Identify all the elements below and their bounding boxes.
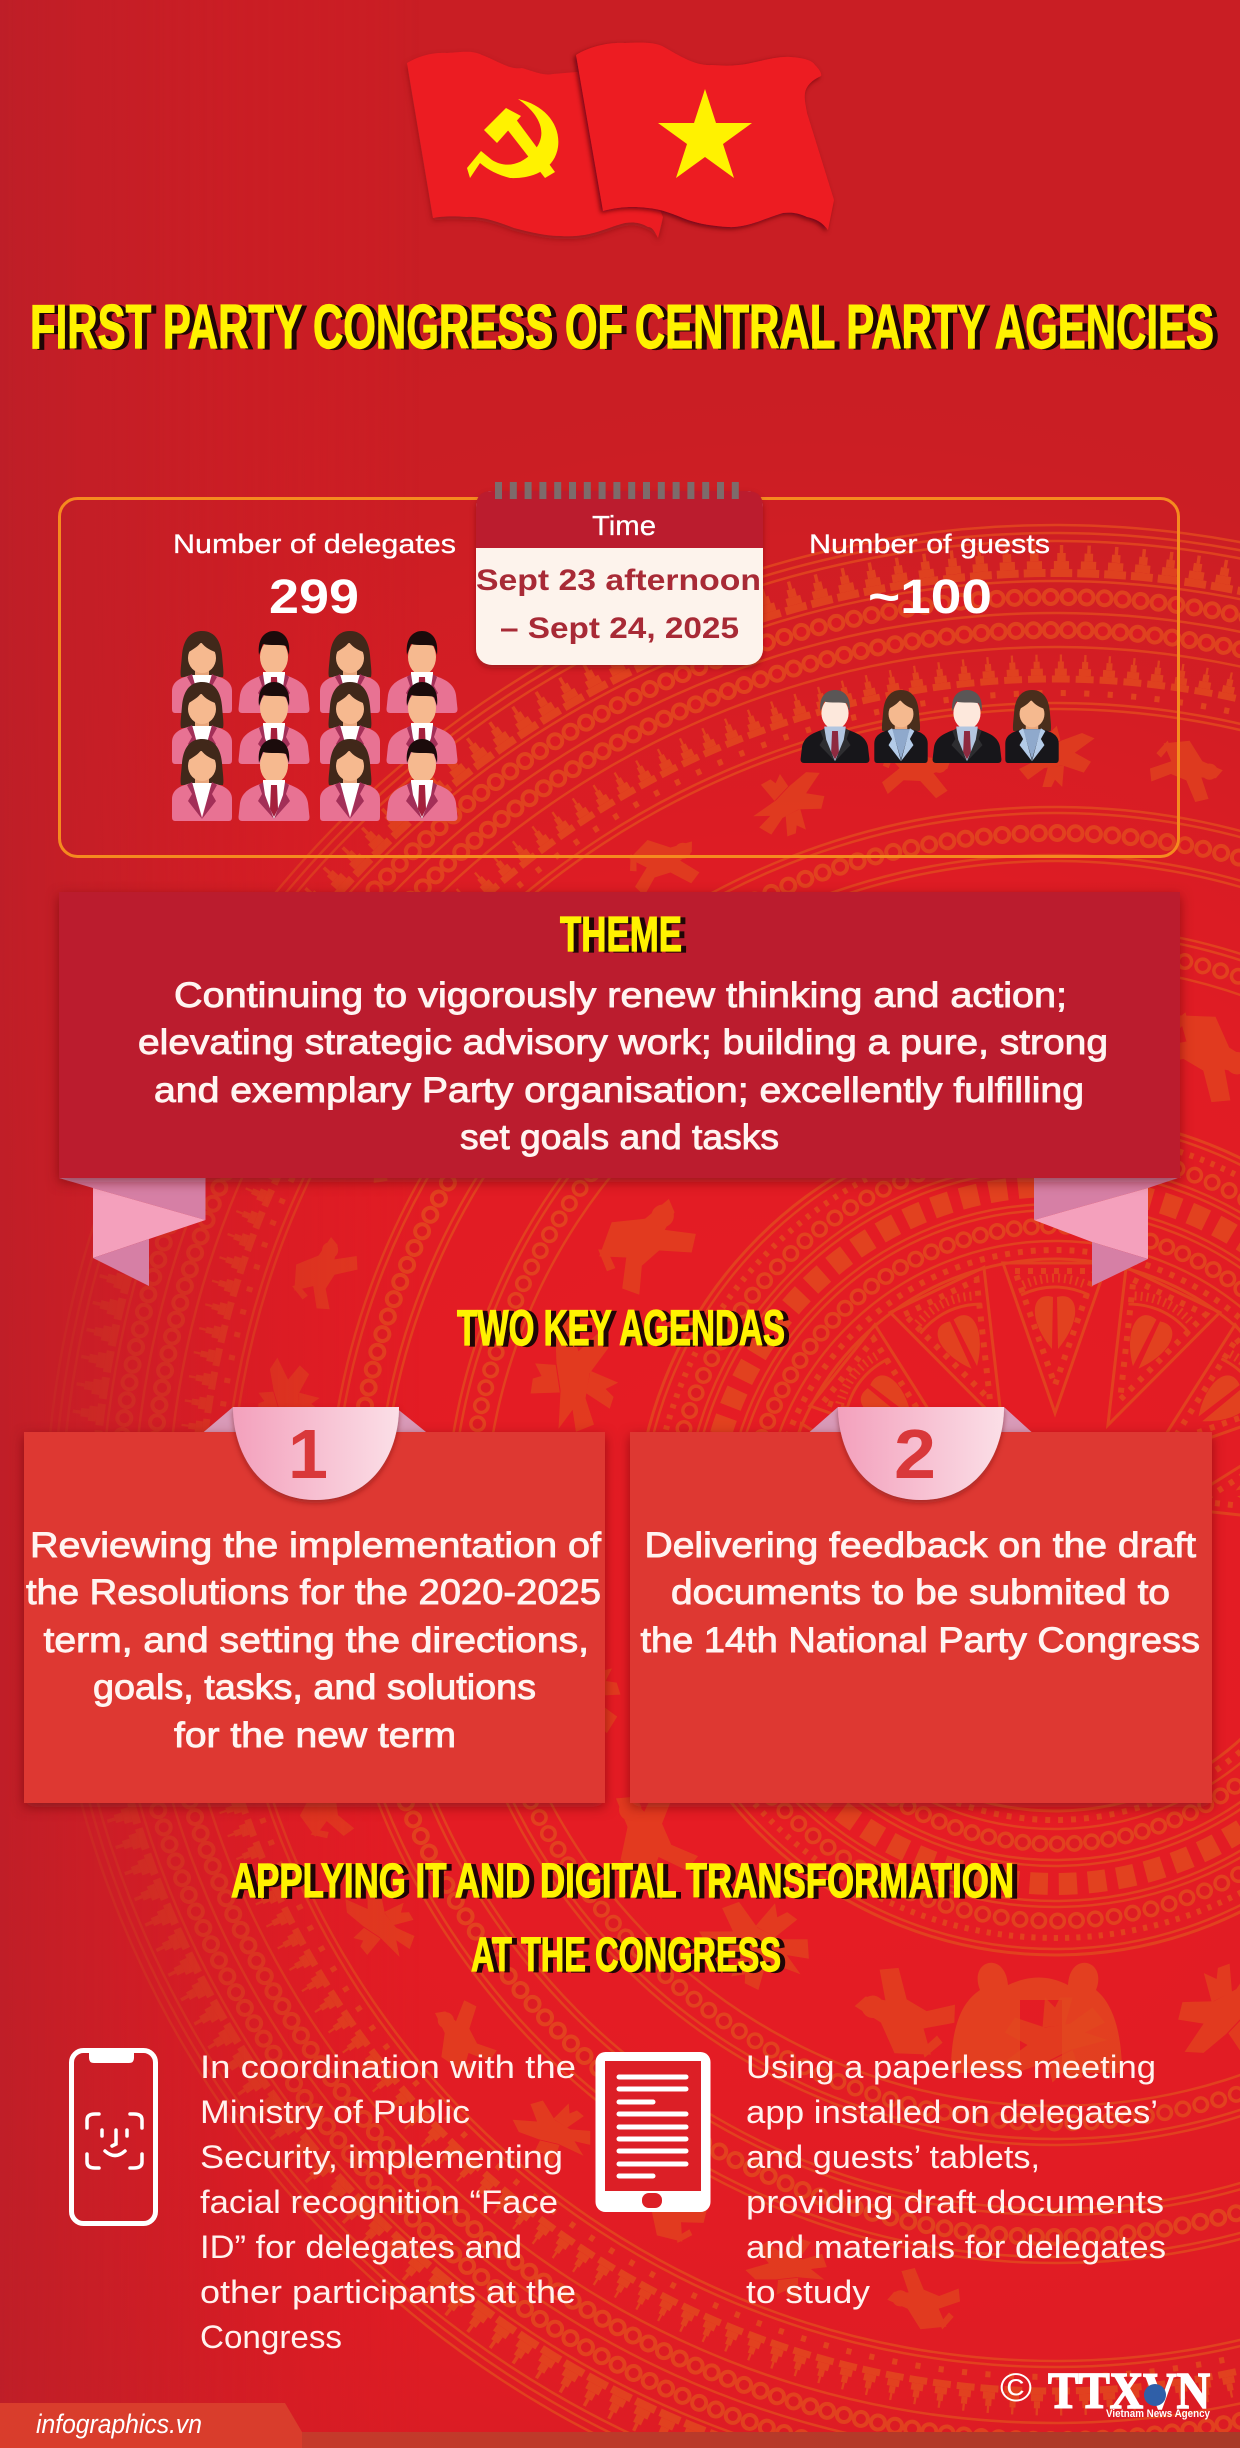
- heading: theme: THEME: [560, 908, 682, 962]
- text: theme statement: [138, 976, 1108, 1157]
- calendar: time: Sept 23 afternoon: [476, 564, 761, 597]
- badge: number 2: 2: [894, 1415, 936, 1493]
- text: agenda 1: goals, tasks, and solutions: [93, 1668, 536, 1707]
- text: paperless meeting app: [746, 2049, 1166, 2310]
- text: face ID: facial recognition “Face: [200, 2184, 558, 2220]
- flag: Communist Party: [407, 52, 663, 238]
- text: agenda 2: the 14th National Party Congress: [640, 1621, 1200, 1660]
- text: face ID: [200, 2049, 576, 2355]
- text: theme statement: Continuing to vigorously renew thinking and action;: [174, 976, 1067, 1015]
- text: face ID: Security, implementing: [200, 2139, 563, 2175]
- stat: number of delegates: [173, 529, 456, 624]
- text: theme statement: elevating strategic advisory work; building a pure, strong: [138, 1023, 1108, 1062]
- logo: TTXVN: Vietnam News Agency: [1106, 2408, 1211, 2420]
- badge: number 1: [233, 1407, 399, 1500]
- ribbon: left fold: [59, 1178, 206, 1286]
- text: paperless meeting app: providing draft documents: [746, 2184, 1164, 2220]
- icon: phone with face ID: [72, 2050, 156, 2224]
- flags: [407, 42, 834, 238]
- stat: number of guests: [809, 529, 1050, 624]
- text: agenda 1: the Resolutions for the 2020-2025: [26, 1573, 601, 1612]
- calendar: time: – Sept 24, 2025: [500, 612, 739, 645]
- badge: number 2: [838, 1407, 1004, 1500]
- panel: delegates, time and guests: [60, 490, 1178, 856]
- text: agenda 1: [26, 1526, 601, 1755]
- text: agenda 2: [640, 1526, 1200, 1660]
- calendar: time: [476, 490, 763, 665]
- stat: number of guests: ~100: [868, 571, 992, 624]
- text: agenda 1: for the new term: [174, 1716, 456, 1755]
- stat: number of delegates: Number of delegates: [173, 529, 456, 559]
- text: infographics.vn: infographics.vn: [36, 2409, 202, 2439]
- text: agenda 2: documents to be submited to: [671, 1573, 1170, 1612]
- flag: Vietnam national flag: [576, 42, 834, 230]
- text: face ID: Congress: [200, 2319, 342, 2355]
- text: paperless meeting app: and guests’ tablets,: [746, 2139, 1040, 2175]
- icon: delegates group: [172, 631, 458, 821]
- calendar: time: Time: [592, 510, 656, 541]
- text: face ID: other participants at the: [200, 2274, 576, 2310]
- text: face ID: In coordination with the: [200, 2049, 576, 2085]
- text: face ID: ID” for delegates and: [200, 2229, 522, 2265]
- text: theme statement: and exemplary Party organisation; excellently fulfilling: [154, 1071, 1084, 1110]
- heading: applying IT and digital transformation: [231, 1855, 1014, 1982]
- text: agenda 2: Delivering feedback on the draft: [644, 1526, 1196, 1565]
- text: paperless meeting app: and materials for delegates: [746, 2229, 1166, 2265]
- panel: theme banner: [59, 892, 1181, 1286]
- heading: applying IT and digital transformation: AT THE CONGRESS: [471, 1929, 781, 1982]
- panel: agenda 2: [630, 1407, 1212, 1803]
- icon: guests group: [801, 690, 1059, 763]
- text: paperless meeting app: app installed on delegates’: [746, 2094, 1158, 2130]
- text: agenda 1: Reviewing the implementation of: [30, 1526, 601, 1565]
- text: agenda 1: term, and setting the directions,: [44, 1621, 589, 1660]
- ribbon: right fold: [1034, 1177, 1181, 1286]
- icon: tablet with document: [596, 2052, 710, 2212]
- logo: TTXVN: ©: [1000, 2366, 1032, 2410]
- badge: number 1: 1: [288, 1415, 328, 1493]
- footer bar: [0, 2403, 1240, 2448]
- panel: agenda 1: [24, 1407, 605, 1803]
- logo: TTXVN: TTXVN: [1048, 2363, 1210, 2420]
- text: paperless meeting app: Using a paperless meeting: [746, 2049, 1156, 2085]
- stat: number of guests: Number of guests: [809, 529, 1050, 559]
- heading: two key agendas: TWO KEY AGENDAS: [457, 1300, 785, 1356]
- text: theme statement: set goals and tasks: [460, 1118, 779, 1157]
- text: face ID: Ministry of Public: [200, 2094, 470, 2130]
- stat: number of delegates: 299: [269, 571, 359, 624]
- text: paperless meeting app: to study: [746, 2274, 870, 2310]
